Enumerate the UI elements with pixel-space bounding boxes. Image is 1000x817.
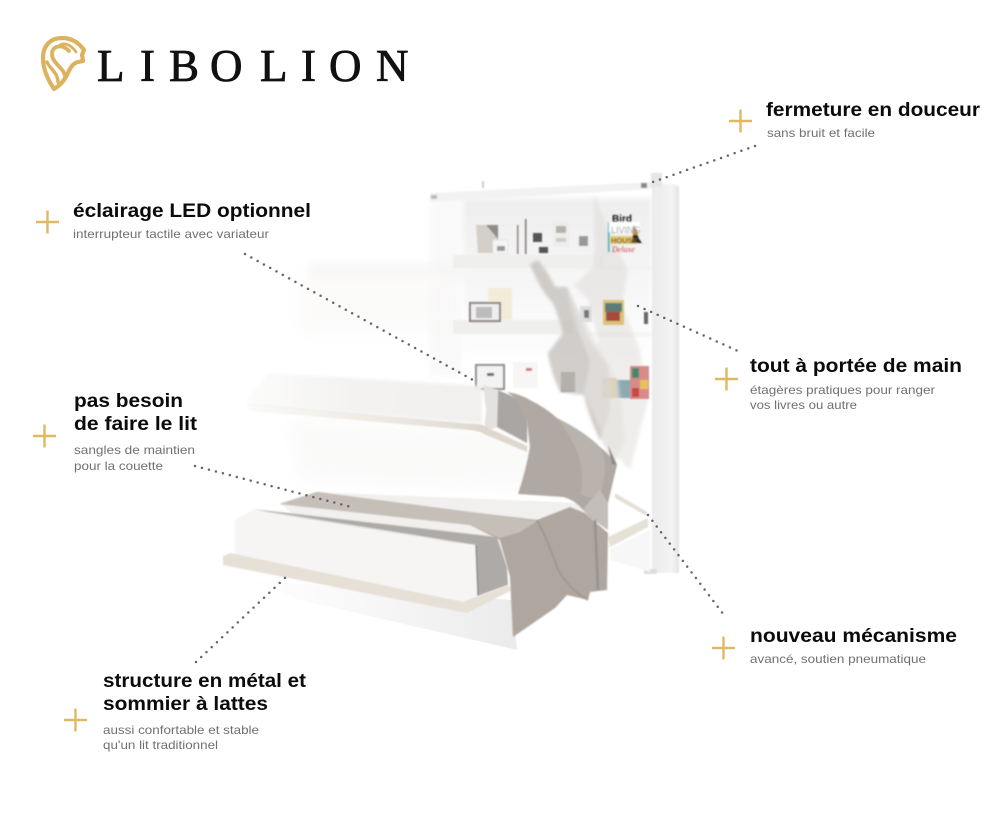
description: pour la couette [74, 459, 163, 473]
dotted leader lines [195, 146, 755, 662]
description: vos livres ou autre [750, 398, 857, 412]
description [750, 383, 935, 412]
description [103, 723, 259, 752]
illustration: wall bed with shelves [223, 173, 679, 650]
shelf objects: Bird [612, 214, 632, 225]
description: interrupteur tactile avec variateur [73, 227, 269, 241]
lower bed frame rail [223, 553, 512, 613]
icon: gold lion head [43, 38, 84, 89]
heading: éclairage LED optionnel [73, 200, 311, 222]
cabinet frame [430, 173, 679, 574]
heading: nouveau mécanisme [750, 625, 957, 647]
heading: sommier à lattes [103, 693, 268, 715]
description: aussi confortable et stable [103, 723, 259, 737]
ghost mattress upper position [246, 373, 560, 490]
description: étagères pratiques pour ranger [750, 383, 935, 397]
shelf objects: Deluxe [611, 245, 635, 254]
ghost blanket top [574, 194, 648, 470]
callout: fermeture en douceur [729, 99, 980, 140]
logo wordmark: LIBOLION [97, 41, 408, 91]
callout: nouveau mécanisme [712, 625, 957, 666]
lower bed base [250, 580, 517, 650]
shelf objects: HOUSE [611, 236, 638, 245]
heading: de faire le lit [74, 413, 198, 435]
icon: plus [712, 636, 735, 660]
shelves [453, 255, 652, 337]
ghost blanket mid-way [530, 260, 625, 470]
icon: plus [715, 368, 738, 390]
callout: éclairage LED [36, 200, 311, 241]
heading: fermeture en douceur [766, 99, 980, 121]
heading [74, 390, 198, 435]
heading: tout à portée de main [750, 355, 962, 377]
shelf objects [470, 214, 649, 399]
icon: plus [729, 110, 752, 132]
heading: structure en métal et [103, 670, 307, 692]
callout: pas besoin de faire le lit [33, 390, 198, 473]
heading: pas besoin [74, 390, 183, 412]
blanket lower [280, 492, 608, 637]
blanket upper [507, 392, 617, 530]
callout: structure en métal [64, 670, 307, 752]
icon: plus [64, 708, 87, 732]
description: sans bruit et facile [767, 126, 875, 140]
callout: tout à portée de main [715, 355, 962, 412]
shelf objects: LIVING [611, 225, 641, 235]
description: qu'un lit traditionnel [103, 738, 218, 752]
logo: Libolion [43, 38, 408, 91]
mechanism arm [608, 493, 650, 572]
description [74, 443, 195, 473]
heading [103, 670, 307, 715]
description: sangles de maintien [74, 443, 195, 457]
lower mattress [235, 492, 600, 602]
icon: plus [36, 210, 59, 234]
description: avancé, soutien pneumatique [750, 652, 926, 666]
icon: plus [33, 424, 56, 448]
cabinet interior [300, 192, 652, 572]
